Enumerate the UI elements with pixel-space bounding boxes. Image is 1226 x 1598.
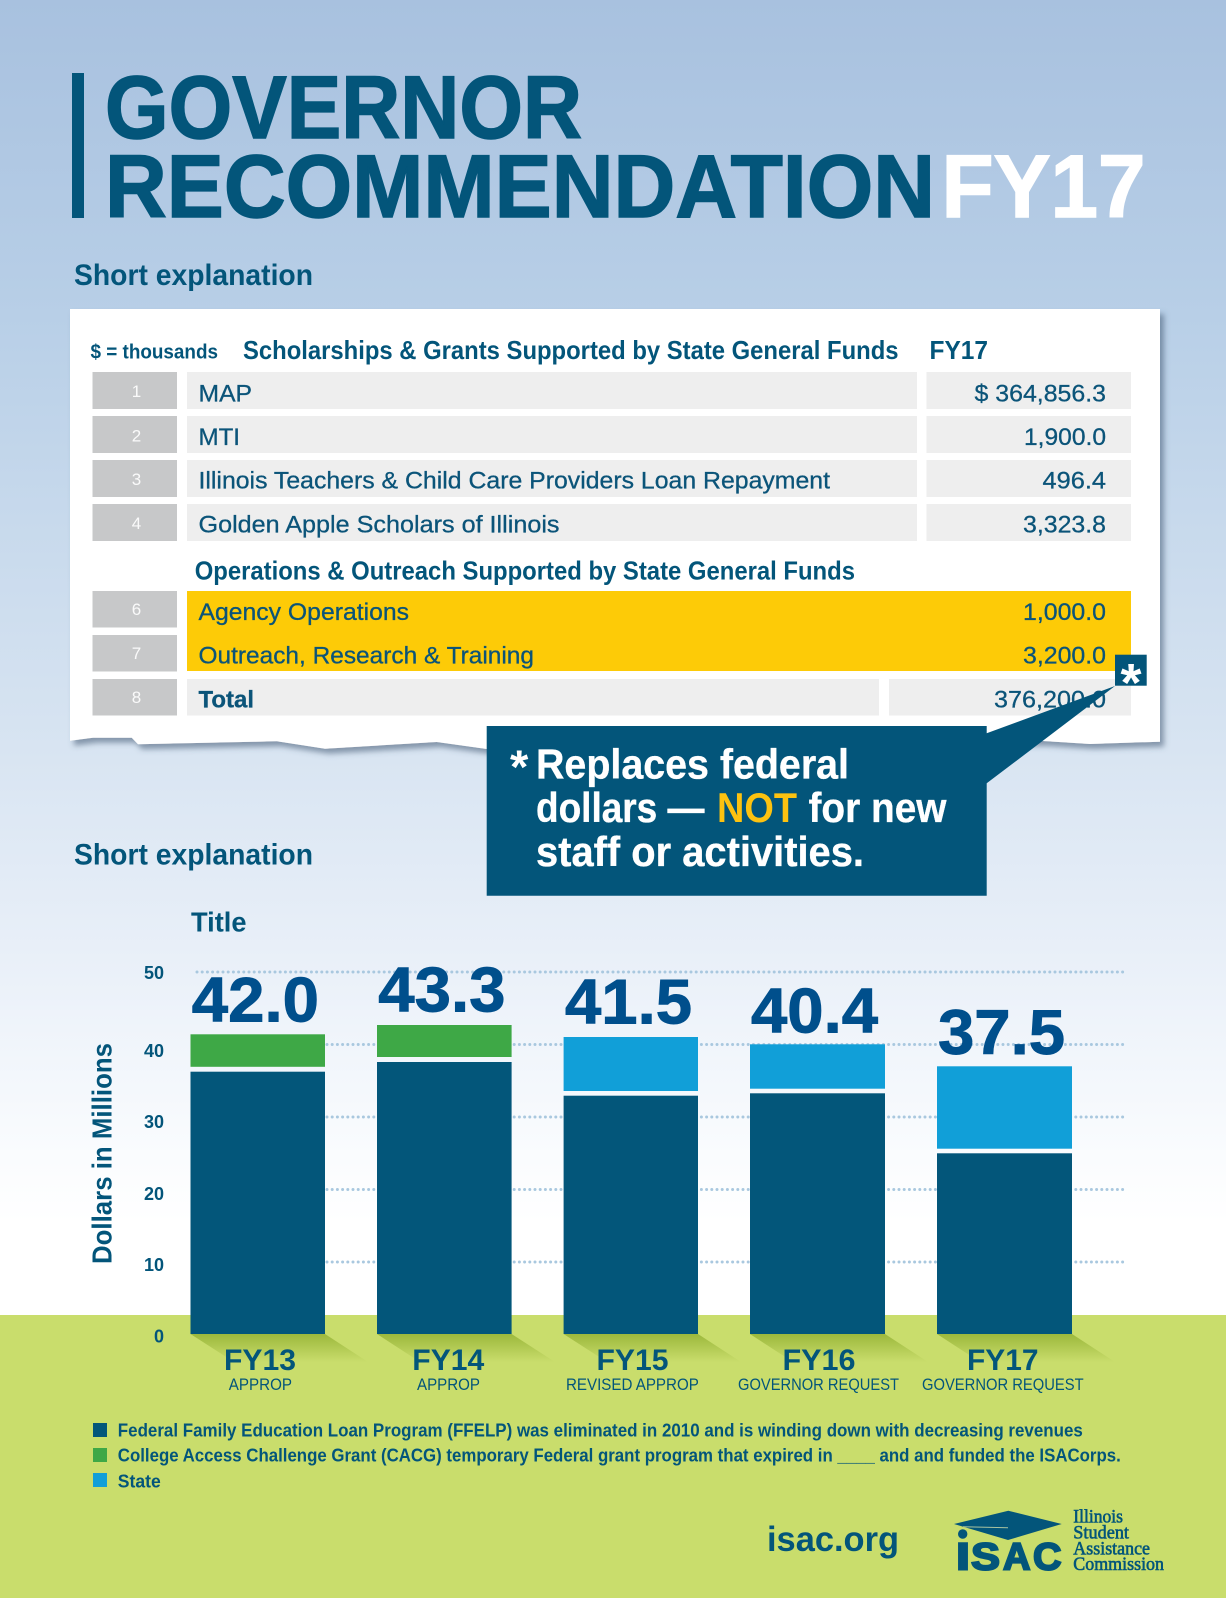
bar shadows bbox=[190, 1334, 1115, 1362]
callout text: for new bbox=[808, 784, 947, 831]
title block bbox=[72, 57, 1146, 236]
total row: 376,200.0 bbox=[994, 686, 1106, 714]
row 1 MAP: 1 bbox=[132, 382, 141, 401]
row 1 MAP bbox=[92, 372, 1131, 409]
logo agency name: Student bbox=[1073, 1524, 1130, 1544]
bar FY17: 37.5 bbox=[938, 998, 1065, 1068]
x axis labels: FY15 bbox=[596, 1344, 668, 1377]
bar FY16 bbox=[750, 977, 885, 1334]
asterisk marker: * bbox=[1120, 653, 1142, 713]
legend bbox=[93, 1421, 1121, 1492]
y axis labels: 20 bbox=[144, 1184, 164, 1204]
title line 1: GOVERNOR bbox=[105, 57, 582, 157]
y axis labels: 10 bbox=[144, 1255, 164, 1275]
row 2 MTI bbox=[92, 416, 1131, 453]
logo wordmark bbox=[956, 1529, 1062, 1579]
table header row: Scholarships & Grants Supported by State General Funds bbox=[243, 335, 898, 365]
section heading 2: Short explanation bbox=[74, 838, 313, 872]
total row: Total bbox=[198, 686, 254, 713]
x axis labels: FY14 bbox=[412, 1344, 485, 1377]
ISAC logo bbox=[954, 1508, 1164, 1579]
row 1 MAP: $ 364,856.3 bbox=[974, 380, 1106, 408]
table header row: FY17 bbox=[930, 335, 988, 365]
bar FY13: 42.0 bbox=[192, 966, 319, 1036]
x axis labels bbox=[224, 1344, 1084, 1394]
row 3 Illinois Teachers: Illinois Teachers & Child Care Providers Loan Repayment bbox=[198, 467, 830, 494]
row 2 MTI: MTI bbox=[198, 424, 240, 451]
highlighted rows 6 and 7: 1,000.0 bbox=[1023, 599, 1106, 626]
bar FY17 bbox=[937, 998, 1072, 1334]
bar FY15 bbox=[564, 967, 698, 1334]
row 4 Golden Apple: Golden Apple Scholars of Illinois bbox=[198, 511, 560, 538]
highlighted rows 6 and 7: 7 bbox=[132, 644, 141, 663]
x axis labels: GOVERNOR REQUEST bbox=[922, 1375, 1084, 1394]
row 3 Illinois Teachers: 496.4 bbox=[1042, 467, 1106, 494]
chart title: Title bbox=[191, 907, 246, 938]
torn paper card bbox=[70, 309, 1160, 749]
y axis title: Dollars in Millions bbox=[86, 1043, 118, 1264]
callout text: * bbox=[510, 740, 529, 793]
legend item FFELP: Federal Family Education Loan Program (FFELP) was eliminated in 2010 and is winding down with decreasing revenues bbox=[118, 1421, 1083, 1441]
x axis labels: FY16 bbox=[782, 1344, 856, 1377]
logo agency name bbox=[1073, 1508, 1164, 1575]
legend item State: State bbox=[118, 1472, 161, 1492]
website url: isac.org bbox=[767, 1520, 899, 1559]
row 2 MTI: 1,900.0 bbox=[1024, 424, 1106, 451]
grid lines bbox=[197, 972, 1123, 1262]
callout text: staff or activities. bbox=[536, 828, 864, 875]
operations subheading: Operations & Outreach Supported by State General Funds bbox=[195, 555, 855, 585]
row 2 MTI: 2 bbox=[132, 426, 141, 446]
row 1 MAP: MAP bbox=[198, 381, 252, 408]
bar chart bbox=[86, 956, 1123, 1394]
title accent bar bbox=[72, 73, 84, 218]
highlighted rows 6 and 7: 3,200.0 bbox=[1023, 642, 1106, 669]
asterisk marker bbox=[1115, 653, 1147, 713]
logo agency name: Commission bbox=[1073, 1555, 1164, 1575]
row 3 Illinois Teachers bbox=[92, 460, 1131, 497]
row 4 Golden Apple: 4 bbox=[132, 514, 141, 533]
x axis labels: APPROP bbox=[417, 1375, 480, 1394]
y axis labels: 40 bbox=[144, 1041, 164, 1061]
icon: graduation cap bbox=[954, 1511, 1062, 1540]
logo wordmark: A bbox=[1003, 1537, 1030, 1579]
callout: replaces federal dollars bbox=[487, 653, 1147, 896]
legend item State bbox=[93, 1472, 161, 1492]
row 4 Golden Apple bbox=[92, 504, 1131, 541]
logo wordmark: C bbox=[1033, 1537, 1062, 1579]
logo wordmark: I bbox=[956, 1537, 970, 1579]
highlighted rows 6 and 7: Agency Operations bbox=[198, 599, 409, 626]
row 4 Golden Apple: 3,323.8 bbox=[1023, 511, 1106, 538]
total row bbox=[92, 679, 1131, 716]
total row: 8 bbox=[132, 688, 141, 707]
y axis labels: 0 bbox=[154, 1326, 164, 1346]
highlighted rows 6 and 7: 6 bbox=[132, 600, 141, 619]
x axis labels: FY17 bbox=[967, 1344, 1038, 1377]
logo wordmark: S bbox=[971, 1537, 1000, 1579]
table header row: $ = thousands bbox=[90, 342, 218, 364]
bar FY14: 43.3 bbox=[378, 956, 505, 1026]
row 3 Illinois Teachers: 3 bbox=[132, 470, 141, 489]
callout text bbox=[510, 740, 947, 875]
y axis labels: 50 bbox=[144, 963, 164, 983]
callout box with pointer bbox=[487, 686, 1115, 896]
y axis labels: 30 bbox=[144, 1112, 164, 1132]
section heading 1: Short explanation bbox=[74, 259, 313, 292]
callout text: NOT bbox=[717, 784, 797, 831]
bar FY15: 41.5 bbox=[565, 967, 692, 1037]
x axis labels: REVISED APPROP bbox=[566, 1375, 699, 1394]
green ground band bbox=[0, 1315, 1226, 1598]
panel: budget table bbox=[70, 309, 1160, 749]
bar FY14 bbox=[377, 956, 512, 1334]
x axis labels: FY13 bbox=[224, 1344, 296, 1377]
x axis labels: GOVERNOR REQUEST bbox=[738, 1375, 899, 1394]
x axis labels: APPROP bbox=[229, 1375, 292, 1394]
title line 2: RECOMMENDATION bbox=[105, 136, 935, 236]
highlighted rows 6 and 7: Outreach, Research & Training bbox=[198, 642, 534, 669]
bar FY16: 40.4 bbox=[751, 977, 878, 1047]
title year: FY17 bbox=[942, 136, 1146, 236]
logo agency name: Assistance bbox=[1073, 1539, 1150, 1559]
callout text: dollars — bbox=[536, 784, 704, 831]
legend item CACG: College Access Challenge Grant (CACG) temporary Federal grant program that expired in ____ and and funded the ISACorps. bbox=[118, 1446, 1121, 1466]
highlighted rows 6 and 7 bbox=[92, 591, 1131, 672]
logo agency name: Illinois bbox=[1073, 1508, 1123, 1528]
y axis labels bbox=[144, 963, 164, 1346]
callout text: Replaces federal bbox=[536, 740, 849, 788]
bar FY13 bbox=[190, 966, 325, 1334]
